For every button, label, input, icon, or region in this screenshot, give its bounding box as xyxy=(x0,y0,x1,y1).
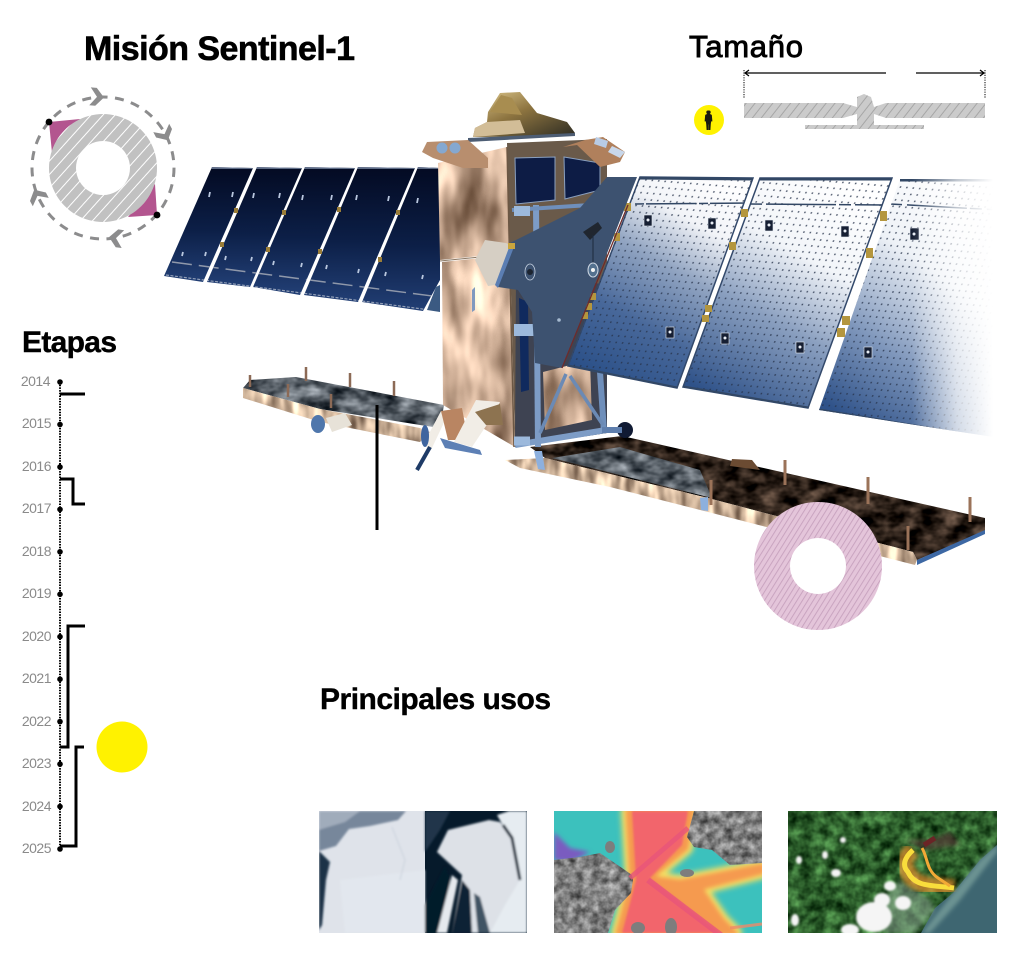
orbit arrow 1 xyxy=(89,87,105,106)
satellite silhouette xyxy=(744,94,985,129)
hatched earth ring xyxy=(49,114,157,222)
year dots xyxy=(57,379,63,852)
blue support frame xyxy=(512,205,606,447)
orbit diagram xyxy=(26,87,176,248)
instrument bay dark side xyxy=(507,139,607,447)
year labels: 2021 xyxy=(22,670,52,686)
stage bracket 1 xyxy=(60,392,85,396)
pink antenna wedge bottom xyxy=(128,184,157,217)
human figure xyxy=(705,110,712,130)
title: Misión Sentinel-1 xyxy=(84,30,355,68)
dimension arrows xyxy=(744,70,985,98)
year labels: 2017 xyxy=(22,500,52,516)
size diagram xyxy=(694,70,985,135)
lava flow xyxy=(905,838,954,888)
dark wing arm xyxy=(498,177,637,368)
rear antenna boom left xyxy=(243,367,444,442)
year labels: 2020 xyxy=(22,628,52,644)
dotted axis xyxy=(59,382,61,849)
foil body xyxy=(438,147,515,447)
year labels: 2019 xyxy=(22,585,52,601)
timeline xyxy=(21,373,148,856)
dashed orbit path xyxy=(32,97,174,239)
satellite xyxy=(160,92,1020,565)
heading: stages: Etapas xyxy=(22,326,117,359)
right panel clips xyxy=(582,203,887,337)
year labels: 2015 xyxy=(22,415,52,431)
coral lanes with yellow fringes xyxy=(618,811,762,933)
top thermal cover xyxy=(473,92,575,137)
image: iceberg xyxy=(319,811,527,933)
year labels: 2014 xyxy=(21,373,51,389)
year labels: 2022 xyxy=(22,713,52,729)
solar panels right wing xyxy=(567,176,988,436)
yellow marker xyxy=(96,722,148,772)
solar panels left wing xyxy=(160,167,450,312)
top plate and shelves xyxy=(422,133,625,168)
year labels: 2025 xyxy=(22,840,52,856)
orbit arrow 4 xyxy=(26,185,49,206)
year labels: 2023 xyxy=(22,755,52,771)
fade on right wing xyxy=(912,170,1002,455)
satellite dot 2 xyxy=(154,212,160,218)
satellite dot 1 xyxy=(46,119,52,125)
stage bracket 3 xyxy=(60,626,85,747)
hinge connector xyxy=(472,240,515,312)
orbit arrow 2 xyxy=(153,124,176,145)
stage bracket 4 xyxy=(60,747,84,846)
pink hatched ring xyxy=(754,502,882,630)
year labels: 2024 xyxy=(22,798,52,814)
human scale circle xyxy=(694,105,724,135)
leader line xyxy=(376,405,378,530)
image: volcano eruption xyxy=(788,811,997,936)
heading: size: Tamaño xyxy=(689,29,803,64)
orbit arrow 3 xyxy=(108,228,124,248)
antenna boom right xyxy=(505,436,985,565)
heading: main uses: Principales usos xyxy=(320,683,551,716)
lower body brackets xyxy=(417,400,633,470)
year labels xyxy=(21,373,52,856)
year labels: 2018 xyxy=(22,543,52,559)
pink antenna wedge top xyxy=(49,119,80,153)
image: shipping lanes xyxy=(554,811,762,936)
stage bracket 2 xyxy=(60,479,85,504)
year labels: 2016 xyxy=(22,458,52,474)
